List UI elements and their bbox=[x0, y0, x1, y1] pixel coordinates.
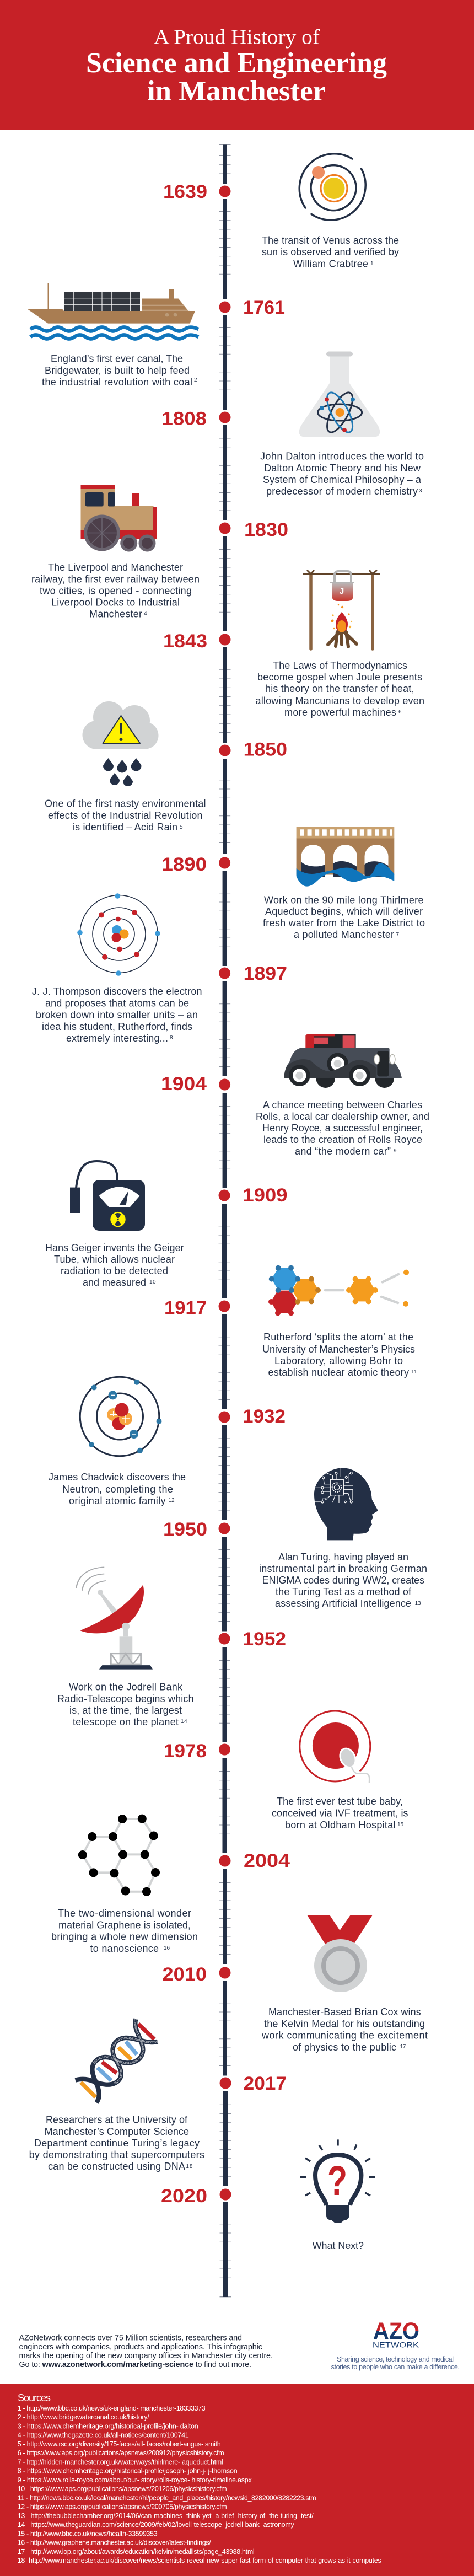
text block: by demonstrating that supercomputers bbox=[29, 2149, 204, 2160]
year 2004: 2004 bbox=[244, 1850, 290, 1871]
text block: material Graphene is isolated, bbox=[58, 1920, 191, 1931]
text block bbox=[261, 2006, 428, 2053]
title: in Manchester bbox=[147, 76, 326, 107]
text block: 18 bbox=[186, 2164, 193, 2170]
company blurb: marks the opening of the new company offices in Manchester city centre. bbox=[19, 2352, 273, 2360]
icon: cargo ship on water bbox=[27, 283, 198, 339]
text block bbox=[260, 451, 424, 497]
year 1917: 1917 bbox=[164, 1298, 207, 1319]
sources list: 9 - https://www.rolls-royce.com/about/our- story/rolls-royce- history-timeline.aspx bbox=[18, 2476, 252, 2484]
sources list: 3 - https://www.chemheritage.org/historical-profile/john- dalton bbox=[18, 2423, 198, 2430]
icon: medal bbox=[307, 1915, 373, 1992]
text block: Aqueduct begins, which will deliver bbox=[265, 906, 423, 917]
text block: telescope on the planet bbox=[73, 1716, 179, 1727]
AZoNetwork logo: AZO bbox=[373, 2318, 419, 2344]
text block: Researchers at the University of bbox=[46, 2115, 188, 2126]
text block: two cities, is opened - connecting bbox=[40, 586, 192, 597]
text block: the industrial revolution with coal bbox=[42, 377, 192, 388]
text block: 7 bbox=[396, 932, 399, 938]
text block: The two-dimensional wonder bbox=[58, 1908, 191, 1919]
text block bbox=[259, 1552, 427, 1609]
text block: and measured bbox=[83, 1277, 146, 1288]
panel: 1843 Laws of Thermodynamics bbox=[163, 570, 424, 718]
text block bbox=[262, 235, 399, 269]
text block: become gospel when Joule presents bbox=[257, 672, 422, 683]
text block: original atomic family bbox=[69, 1495, 165, 1506]
icon: warning cloud with rain bbox=[83, 701, 159, 786]
sources list: 18- http://www.manchester.ac.uk/discover/news/scientists-reveal-new-super-fast-form-of-computer-that-grows-as-it-computes bbox=[18, 2557, 381, 2564]
sources list: 16 - http://www.graphene.manchester.ac.uk/discover/latest-findings/ bbox=[18, 2539, 211, 2547]
text block: 1 bbox=[370, 261, 374, 267]
text block bbox=[262, 1332, 417, 1378]
text block: Hans Geiger invents the Geiger bbox=[45, 1242, 184, 1253]
text block: conceived via IVF treatment, is bbox=[272, 1808, 408, 1819]
sources panel bbox=[0, 2384, 474, 2576]
year 1639: 1639 bbox=[163, 181, 207, 202]
icon: sun and Venus orbits bbox=[299, 154, 365, 220]
timeline marker bbox=[218, 1412, 230, 1423]
panel: 1808 John Dalton bbox=[162, 352, 424, 497]
text block: radiation to be detected bbox=[61, 1265, 168, 1276]
text block: work communicating the excitement bbox=[261, 2030, 428, 2041]
sources list: 4 - https://www.thegazette.co.uk/all-notices/content/100741 bbox=[18, 2432, 189, 2439]
text block: James Chadwick discovers the bbox=[49, 1472, 186, 1483]
panel: 2020 what next bbox=[161, 2139, 375, 2251]
text block: 4 bbox=[144, 611, 147, 617]
text block: assessing Artificial Intelligence bbox=[275, 1598, 411, 1609]
timeline marker bbox=[219, 2078, 231, 2089]
sources list: 15 - http://www.bbc.co.uk/news/health-33599353 bbox=[18, 2530, 158, 2537]
text block bbox=[29, 2115, 204, 2172]
year 2010: 2010 bbox=[162, 1964, 207, 1985]
year 1904: 1904 bbox=[161, 1074, 207, 1094]
sources list: 8 - https://www.chemheritage.org/historical-profile/joseph- john-j- j-thomson bbox=[18, 2467, 238, 2475]
panel: 2004 graphene bbox=[51, 1815, 290, 1954]
timeline spine bbox=[224, 144, 225, 2297]
text block bbox=[49, 1472, 186, 1506]
logo tagline: stories to people who can make a difference. bbox=[331, 2363, 460, 2371]
text block: Rutherford ‘splits the atom’ at the bbox=[263, 1332, 413, 1343]
text block: 15 bbox=[397, 1822, 403, 1828]
logo tagline bbox=[331, 2355, 460, 2371]
timeline marker bbox=[219, 1967, 230, 1978]
text block: University of Manchester’s Physics bbox=[262, 1344, 415, 1355]
year 1978: 1978 bbox=[164, 1741, 207, 1762]
AZoNetwork logo bbox=[331, 2318, 460, 2371]
logo tagline: Sharing science, technology and medical bbox=[337, 2355, 454, 2363]
text block: Manchester bbox=[89, 609, 142, 620]
panel: 1639 transit of Venus bbox=[163, 154, 399, 269]
year 2017: 2017 bbox=[244, 2073, 287, 2094]
text block: broken down into smaller units – an bbox=[36, 1009, 198, 1020]
timeline marker bbox=[219, 744, 230, 756]
text block bbox=[57, 1682, 194, 1727]
icon: radio telescope bbox=[76, 1567, 153, 1670]
text block: One of the first nasty environmental bbox=[45, 798, 206, 809]
text block: 13 bbox=[415, 1601, 421, 1607]
text block bbox=[51, 1908, 198, 1954]
text block: Department continue Turing’s legacy bbox=[34, 2138, 200, 2149]
icon: Geiger counter bbox=[70, 1161, 145, 1231]
year 1932: 1932 bbox=[243, 1406, 286, 1427]
icon: graphene lattice bbox=[78, 1815, 160, 1896]
header banner bbox=[0, 0, 474, 130]
timeline marker bbox=[219, 185, 230, 197]
year 1950: 1950 bbox=[163, 1519, 207, 1540]
icon: pot over campfire bbox=[303, 570, 380, 649]
text block: Neutron, completing the bbox=[62, 1484, 173, 1495]
text block: his theory on the transfer of heat, bbox=[265, 683, 414, 694]
text block: 8 bbox=[170, 1035, 173, 1041]
text block: to nanoscience bbox=[90, 1943, 159, 1954]
icon: aqueduct bridge bbox=[297, 827, 394, 887]
sources list: 14 - https://www.theguardian.com/science/2009/feb/02/lovell-telescope- jodrell-bank- astronomy bbox=[18, 2521, 294, 2529]
timeline marker bbox=[219, 1855, 230, 1867]
text block bbox=[263, 894, 425, 940]
title: A Proud History of bbox=[154, 25, 320, 49]
icon: light bulb with question mark bbox=[300, 2139, 375, 2223]
timeline marker bbox=[219, 634, 230, 645]
text block: William Crabtree bbox=[293, 258, 368, 269]
icon: steam locomotive bbox=[80, 485, 157, 551]
text block: 12 bbox=[169, 1498, 175, 1504]
year 1761: 1761 bbox=[243, 297, 285, 318]
text block bbox=[45, 798, 206, 833]
timeline marker bbox=[219, 301, 230, 313]
panel: 1850 acid rain bbox=[45, 701, 287, 833]
timeline marker bbox=[219, 523, 230, 534]
panel: 1890 Thirlmere Aqueduct bbox=[162, 827, 425, 940]
panel: 2017 DNA computing bbox=[29, 2018, 287, 2172]
text block bbox=[256, 1099, 429, 1157]
text block: The transit of Venus across the bbox=[262, 235, 399, 246]
timeline marker bbox=[218, 1523, 230, 1534]
text block: 9 bbox=[394, 1148, 397, 1154]
sources list: 13 - http://thebubblechamber.org/2014/06/can-machines- think-yet- a-brief- history-of- the-turing- test/ bbox=[18, 2512, 314, 2520]
timeline marker bbox=[219, 411, 230, 423]
icon: vintage car bbox=[284, 1034, 402, 1088]
text block: is identified – Acid Rain bbox=[73, 822, 177, 833]
panel: 1830 Liverpool and Manchester railway bbox=[31, 485, 288, 620]
text block: is, at the time, the largest bbox=[69, 1705, 182, 1716]
panel: 2010 Brian Cox Kelvin Medal bbox=[162, 1915, 428, 2053]
text block bbox=[272, 1796, 408, 1831]
company blurb: engineers with companies, products and applications. This infographic bbox=[19, 2343, 262, 2352]
text block: instrumental part in breaking German bbox=[259, 1563, 427, 1574]
sources list: 11 - http://news.bbc.co.uk/local/manchester/hi/people_and_places/history/newsid_8282000/8282223.stm bbox=[18, 2494, 316, 2502]
sources list: 12 - https://www.aps.org/publications/apsnews/200705/physicshistory.cfm bbox=[18, 2503, 227, 2511]
text block: 17 bbox=[400, 2044, 406, 2050]
timeline marker bbox=[218, 1633, 230, 1644]
text block: leads to the creation of Rolls Royce bbox=[263, 1134, 422, 1145]
sources heading: Sources bbox=[18, 2392, 51, 2403]
panel: 1909 Geiger tube bbox=[45, 1161, 288, 1288]
timeline marker bbox=[218, 1190, 230, 1201]
icon: binary DNA helix: 0111000001110001000100110000110001100011100000110001110001100 bbox=[111, 2037, 158, 2084]
icon: egg and sperm bbox=[300, 1711, 370, 1783]
year 1808: 1808 bbox=[162, 408, 207, 429]
text block: effects of the Industrial Revolution bbox=[48, 810, 203, 821]
icon: binary DNA helix: 0110100001100010100011000100010100011000000110001100011000101 bbox=[93, 2019, 144, 2064]
text block: of physics to the public bbox=[293, 2042, 396, 2053]
panel: 1761 Bridgewater canal bbox=[27, 283, 285, 388]
panel: 1904 Rolls Royce bbox=[161, 1034, 429, 1157]
company blurb bbox=[19, 2334, 273, 2369]
text block bbox=[31, 562, 200, 620]
company blurb: Go to: www.azonetwork.com/marketing-science to find out more. bbox=[19, 2360, 251, 2369]
icon: neutron atom bbox=[80, 1377, 162, 1456]
year 2020: 2020 bbox=[161, 2186, 207, 2207]
text block: Radio-Telescope begins which bbox=[57, 1693, 194, 1704]
text block: fresh water from the Lake District to bbox=[263, 917, 425, 929]
text block: The first ever test tube baby, bbox=[277, 1796, 403, 1807]
company blurb: AZoNetwork connects over 75 Million scientists, researchers and bbox=[19, 2334, 242, 2343]
timeline marker bbox=[219, 967, 230, 979]
text block: Henry Royce, a successful engineer, bbox=[262, 1123, 423, 1134]
timeline marker bbox=[219, 1743, 230, 1756]
text block: What Next? bbox=[313, 2240, 364, 2251]
text block: Work on the Jodrell Bank bbox=[69, 1682, 183, 1693]
text block: Alan Turing, having played an bbox=[278, 1552, 408, 1563]
year 1952: 1952 bbox=[243, 1629, 286, 1650]
text block: can be constructed using DNA bbox=[48, 2161, 185, 2172]
text block: Manchester’s Computer Science bbox=[45, 2126, 189, 2137]
panel: 1897 J. J. Thompson electron bbox=[32, 893, 287, 1044]
timeline marker bbox=[219, 2189, 231, 2200]
year 1850: 1850 bbox=[244, 739, 287, 760]
sources list bbox=[18, 2405, 381, 2564]
sources list: 17 - http://www.iop.org/about/awards/education/kelvin/medallists/page_43988.html bbox=[18, 2548, 255, 2556]
sources list: 2 - http://www.bridgewatercanal.co.uk/history/ bbox=[18, 2413, 149, 2421]
text block: System of Chemical Philosophy – a bbox=[263, 474, 422, 485]
text block: and “the modern car” bbox=[295, 1146, 391, 1157]
text block: Bridgewater, is built to help feed bbox=[45, 365, 190, 376]
AZoNetwork logo: NETWORK bbox=[373, 2340, 419, 2349]
text block: 16 bbox=[164, 1945, 170, 1951]
icon: pot over campfire: J bbox=[340, 587, 344, 596]
text block bbox=[32, 986, 202, 1044]
year 1843: 1843 bbox=[163, 631, 207, 652]
sources list: 6 - https://www.aps.org/publications/apsnews/200912/physicshistory.cfm bbox=[18, 2449, 224, 2457]
sources list: 1 - http://www.bbc.co.uk/news/uk-england- manchester-18333373 bbox=[18, 2405, 206, 2412]
panel: 1950 Alan Turing bbox=[163, 1468, 427, 1609]
year 1830: 1830 bbox=[244, 519, 288, 540]
panel: 1952 Jodrell Bank bbox=[57, 1567, 286, 1727]
title bbox=[86, 25, 387, 107]
text block: 11 bbox=[411, 1369, 417, 1375]
text block: extremely interesting... bbox=[66, 1033, 168, 1044]
text block: Liverpool Docks to Industrial bbox=[51, 597, 180, 608]
timeline marker bbox=[219, 1078, 230, 1091]
text block: Tube, which allows nuclear bbox=[54, 1254, 175, 1265]
panel: 1978 IVF baby bbox=[164, 1711, 408, 1831]
timeline marker bbox=[218, 1300, 230, 1312]
text block: A chance meeting between Charles bbox=[263, 1099, 422, 1110]
text block: Laboratory, allowing Bohr to bbox=[274, 1355, 403, 1366]
timeline marker bbox=[219, 857, 230, 869]
text block: 3 bbox=[419, 488, 422, 494]
text block: ENIGMA codes during WW2, creates bbox=[262, 1575, 424, 1586]
sources list: 7 - http://hidden-manchester.org.uk/waterways/thirlmere- aqueduct.html bbox=[18, 2458, 223, 2466]
text block: and proposes that atoms can be bbox=[45, 998, 189, 1009]
panel: 1932 Chadwick neutron bbox=[49, 1377, 286, 1506]
text block: bringing a whole new dimension bbox=[51, 1931, 198, 1942]
text block bbox=[42, 353, 197, 388]
title: Science and Engineering bbox=[86, 47, 387, 79]
icon: light bulb with question mark: ? bbox=[327, 2158, 347, 2204]
year 1909: 1909 bbox=[243, 1185, 288, 1206]
text block: The Liverpool and Manchester bbox=[48, 562, 183, 573]
text block: J. J. Thompson discovers the electron bbox=[32, 986, 202, 997]
text block bbox=[256, 660, 424, 718]
text block: The Laws of Thermodynamics bbox=[273, 660, 407, 671]
text block: 10 bbox=[149, 1279, 156, 1285]
text block: establish nuclear atomic theory bbox=[268, 1367, 409, 1378]
text block: allowing Mancunians to develop even bbox=[256, 695, 424, 706]
text block: a polluted Manchester bbox=[294, 929, 394, 940]
year 1890: 1890 bbox=[162, 854, 207, 875]
text block: Rolls, a local car dealership owner, and bbox=[256, 1111, 429, 1122]
icon: binary DNA helix bbox=[75, 2018, 159, 2104]
text block: predecessor of modern chemistry bbox=[266, 486, 418, 497]
text block: 2 bbox=[194, 377, 197, 383]
text block: 14 bbox=[181, 1719, 187, 1725]
text block: the Kelvin Medal for his outstanding bbox=[264, 2019, 425, 2030]
panel: 1917 Rutherford splits the atom bbox=[164, 1265, 417, 1378]
icon: electron shell atom bbox=[77, 893, 160, 976]
text block: Dalton Atomic Theory and his New bbox=[264, 463, 421, 474]
icon: splitting hexagonal atoms bbox=[268, 1265, 409, 1316]
text block: idea his student, Rutherford, finds bbox=[42, 1021, 192, 1032]
text block: sun is observed and verified by bbox=[262, 246, 399, 257]
sources list: 5 - http://www.rsc.org/diversity/175-faces/all- faces/robert-angus- smith bbox=[18, 2440, 221, 2448]
text block: born at Oldham Hospital bbox=[285, 1820, 396, 1831]
text block: Manchester-Based Brian Cox wins bbox=[268, 2006, 421, 2017]
text block: England’s first ever canal, The bbox=[51, 353, 183, 364]
text block: more powerful machines bbox=[284, 707, 396, 718]
text block: 6 bbox=[398, 709, 402, 715]
text block: 5 bbox=[180, 824, 183, 830]
year 1897: 1897 bbox=[244, 963, 287, 984]
icon: head with circuit brain bbox=[314, 1468, 378, 1540]
sources list: 10 - https://www.aps.org/publications/apsnews/201206/physicshistory.cfm bbox=[18, 2485, 227, 2493]
text block: John Dalton introduces the world to bbox=[260, 451, 424, 462]
text block bbox=[45, 1242, 184, 1288]
text block: railway, the first ever railway between bbox=[31, 573, 200, 584]
text block: Work on the 90 mile long Thirlmere bbox=[264, 894, 423, 905]
icon: flask with atom bbox=[299, 352, 380, 437]
text block: the Turing Test as a method of bbox=[276, 1586, 412, 1597]
